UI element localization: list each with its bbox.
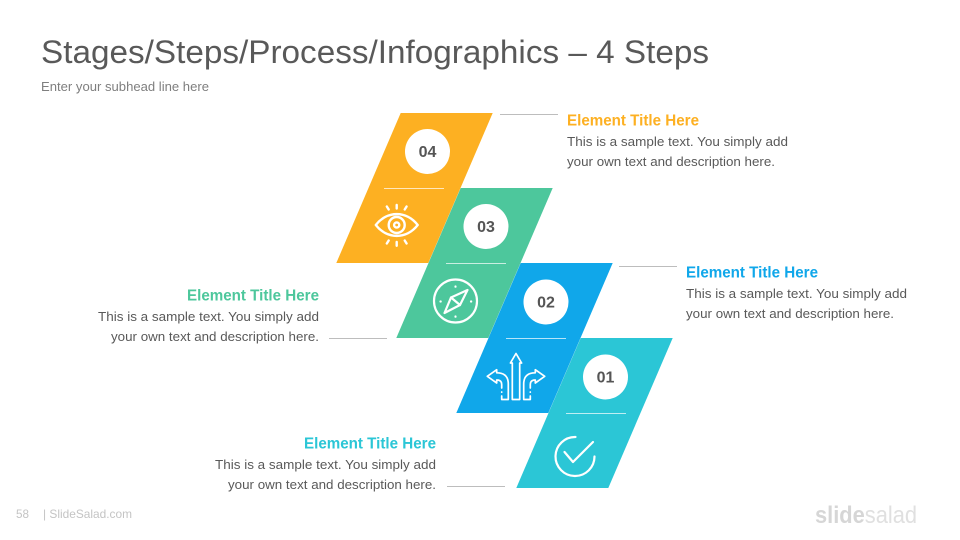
panel: step 04 (336, 113, 493, 263)
footer: page number: 58 (16, 507, 29, 521)
title: Stages/Steps/Process/Infographics – 4 Steps (41, 34, 709, 70)
badge: 04: 04 (419, 144, 436, 161)
callout: step 02 (619, 264, 907, 321)
logo: slidesalad wordmark: slidesalad (815, 502, 917, 529)
panel: step 02 (456, 263, 613, 413)
callout: step 04: Element Title Here (567, 112, 699, 130)
callout: step 03 (98, 288, 387, 344)
footer: source: | SlideSalad.com (43, 507, 132, 521)
callout: step 02: your own text and description here. (686, 307, 894, 321)
callout: step 04 (500, 112, 788, 169)
badge: 03 (464, 204, 508, 249)
badge: 01: 01 (597, 370, 614, 386)
icon: eye (376, 205, 418, 246)
panel: step 03 (396, 188, 553, 338)
icon: compass (434, 280, 477, 322)
callout: step 02: Element Title Here (686, 264, 818, 282)
callout: step 03: your own text and description here. (111, 330, 319, 344)
callout: step 03: Element Title Here (187, 288, 319, 304)
icon: check mark (556, 437, 594, 476)
callout: step 03: This is a sample text. You simply add (98, 310, 319, 324)
callout: step 01: your own text and description here. (228, 478, 436, 492)
badge: 04 (405, 129, 450, 174)
badge: 01 (583, 354, 628, 400)
subhead: Enter your subhead line here (41, 80, 209, 94)
badge: 02: 02 (537, 294, 555, 312)
callout: step 04: your own text and description here. (567, 155, 775, 169)
badge: 03: 03 (477, 219, 495, 236)
icon: diverging arrows (487, 354, 545, 400)
callout: step 01 (215, 436, 505, 492)
callout: step 01: Element Title Here (304, 436, 436, 452)
callout: step 04: This is a sample text. You simply add (567, 135, 788, 149)
panel: step 01 (516, 338, 673, 488)
callout: step 02: This is a sample text. You simply add (686, 287, 907, 301)
callout: step 01: This is a sample text. You simply add (215, 458, 436, 472)
badge: 02 (524, 280, 568, 324)
